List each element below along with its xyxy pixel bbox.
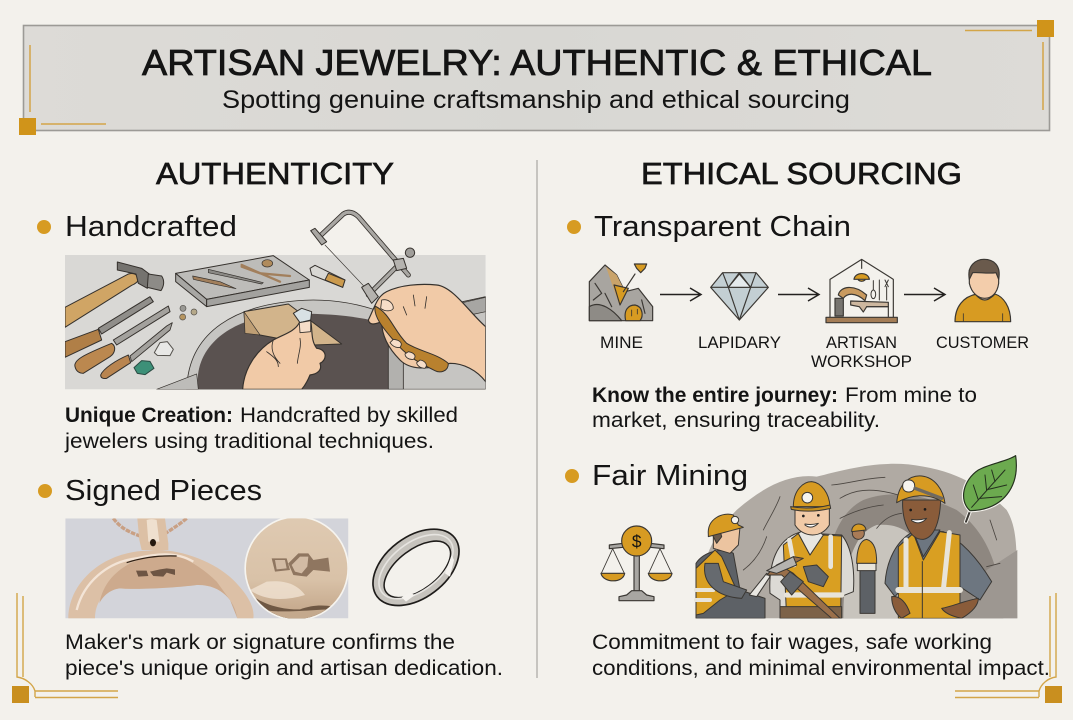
body text: unique creation: jewelers using traditional techniques. [64,429,434,453]
icon: plain ring [359,514,473,621]
left hand [243,321,325,389]
labels: chain steps: WORKSHOP [811,352,912,371]
column divider [536,160,538,678]
distant miner [852,524,877,613]
labels: chain steps: MINE [600,333,643,352]
arrow: lapidary to workshop [778,288,819,301]
body text: commitment: Commitment to fair wages, safe working [592,630,992,654]
body text: maker's mark: Maker's mark or signature confirms the [65,630,455,654]
loose gems [180,305,186,311]
heading: authenticity: AUTHENTICITY [156,156,394,191]
saw frame [311,212,415,303]
illustration: miners in a tunnel [696,456,1017,618]
tool tray [176,256,309,299]
corner ornament: bottom right [955,593,1062,703]
labels: chain steps: ARTISAN [826,333,897,352]
files [65,329,102,357]
corner ornament: top right [965,20,1054,110]
seated miner [696,514,770,618]
arrow: workshop to customer [904,288,945,301]
icon: balance scale with dollar coin [601,526,672,601]
arrow: mine to lapidary [660,288,701,301]
title: ARTISAN JEWELRY: AUTHENTIC & ETHICAL [142,42,932,83]
icon: customer [955,259,1011,322]
corner ornament: top left [19,45,106,135]
body text: entire journey [592,383,977,432]
icon: balance scale with dollar coin: $ [632,532,642,552]
bench pin block [244,304,342,345]
labels: chain steps: LAPIDARY [698,333,781,352]
body text: unique creation: Unique Creation: [65,403,233,427]
subtitle: Spotting genuine craftsmanship and ethical sourcing [222,86,850,114]
subsection: transparent chain heading: Transparent Chain [594,211,851,243]
ring in fingers [293,308,312,323]
labels: chain steps [600,333,1029,371]
right hand [368,284,486,382]
body text: maker's mark [65,630,503,680]
icon: artisan workshop [826,259,897,323]
subsection: handcrafted heading: Handcrafted [65,211,237,243]
photo: pendant with maker's mark [65,515,350,622]
icon: diamond [711,273,768,320]
right miner [885,476,992,618]
body text: unique creation: Handcrafted by skilled [240,403,458,427]
body text: entire journey: market, ensuring traceability. [592,408,880,432]
illustration: jeweler's hands and tools [65,212,486,389]
subsection: fair mining heading: Fair Mining [592,460,748,492]
body text: maker's mark: piece's unique origin and artisan dedication. [65,656,503,680]
heading: ethical sourcing: ETHICAL SOURCING [641,156,962,191]
flow diagram: supply chain [589,259,1029,371]
body text: entire journey: From mine to [845,383,977,407]
burnisher [310,265,345,287]
subsection: signed pieces heading: Signed Pieces [65,475,262,507]
center miner [767,482,854,618]
icon: mine [589,264,653,321]
body text: commitment [592,630,1050,680]
body text: commitment: conditions, and minimal environmental impact. [592,656,1050,680]
hammer [65,273,138,327]
title banner [24,26,1050,130]
body text: entire journey: Know the entire journey: [592,383,838,407]
labels: chain steps: CUSTOMER [936,333,1029,352]
corner ornament: bottom left [12,593,118,703]
icon: green leaf [964,456,1016,522]
body text: unique creation [64,403,458,453]
